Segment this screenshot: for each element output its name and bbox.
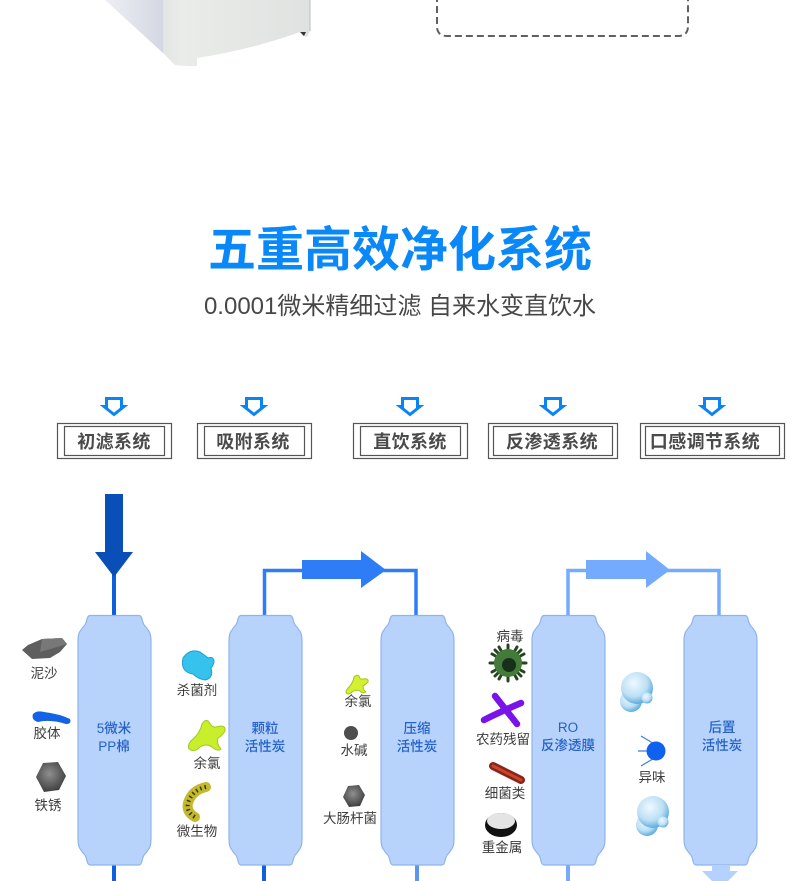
contaminant: 水碱 — [340, 726, 368, 758]
filter: 颗粒活性炭: 颗粒 — [252, 720, 278, 736]
water molecule upper — [620, 672, 653, 712]
contaminant: 余氯: 余氯 — [194, 755, 221, 771]
contaminant: 大肠杆菌 — [323, 785, 377, 826]
contaminant: 重金属 — [482, 813, 522, 855]
system: 反渗透系统 — [488, 398, 618, 458]
system labels row — [58, 398, 784, 458]
contaminant: 泥沙 — [22, 638, 67, 681]
system: 吸附系统: 吸附系统 — [216, 431, 290, 452]
contaminant: 胶体: 胶体 — [34, 725, 61, 741]
filter: RO反渗透膜 — [532, 616, 605, 865]
filter: 5微米 PP棉: 5微米 — [97, 721, 132, 736]
inlet arrow — [95, 494, 133, 616]
system: 口感调节系统: 口感调节系统 — [650, 431, 760, 452]
contaminant: 胶体 — [33, 711, 70, 741]
filter: 后置活性炭: 后置 — [708, 720, 736, 735]
contaminant: 细菌类: 细菌类 — [485, 786, 525, 801]
contaminant: 大肠杆菌: 大肠杆菌 — [323, 811, 377, 826]
filter: 压缩活性炭: 压缩 — [404, 721, 430, 736]
contaminant: 细菌类 — [485, 766, 525, 801]
contaminant: 铁锈 — [34, 762, 66, 813]
contaminant: 重金属: 重金属 — [482, 840, 522, 855]
outlet arrow — [702, 866, 738, 881]
filter: RO反渗透膜: RO — [558, 720, 578, 735]
contaminant: 农药残留 — [476, 696, 530, 747]
system: 初滤系统: 初滤系统 — [77, 431, 151, 452]
water molecule lower — [636, 796, 669, 836]
contaminant: 泥沙: 泥沙 — [30, 666, 58, 681]
product photo: purifier base — [105, 0, 310, 66]
filter: RO反渗透膜: 反渗透膜 — [541, 737, 595, 753]
title: 五重高效净化系统 — [208, 224, 592, 277]
contaminant: 水碱: 水碱 — [340, 743, 368, 758]
contaminant: 病毒: 病毒 — [496, 629, 524, 644]
contaminant: 铁锈: 铁锈 — [34, 798, 62, 813]
contaminant: 余氯 (small): 余氯 — [344, 693, 372, 709]
contaminant: 农药残留: 农药残留 — [476, 732, 530, 747]
filter: 后置活性炭: 活性炭 — [702, 738, 742, 753]
contaminant: 杀菌剂 — [177, 651, 217, 698]
system: 口感调节系统 — [640, 398, 784, 458]
filter: 压缩活性炭 — [381, 616, 454, 865]
system: 吸附系统 — [198, 398, 312, 458]
contaminant: 杀菌剂: 杀菌剂 — [177, 683, 217, 698]
outlet pipes — [112, 865, 570, 881]
contaminant: 异味 — [638, 736, 666, 785]
pipe and arrow: activated carbon stage — [264, 551, 416, 616]
filter: 5微米 PP棉: PP棉 — [98, 738, 130, 754]
filter: 后置活性炭 — [684, 616, 757, 865]
filter: 5微米 PP棉 — [78, 616, 151, 865]
pipe and arrow: RO stage — [568, 551, 719, 616]
contaminant: 微生物 — [177, 787, 217, 839]
contaminant: 病毒 — [490, 629, 526, 681]
contaminant: 余氯 (small) — [344, 675, 372, 709]
system: 直饮系统: 直饮系统 — [373, 431, 447, 452]
filter: 颗粒活性炭: 活性炭 — [245, 739, 285, 754]
contaminant: 异味: 异味 — [638, 770, 666, 785]
subtitle: 0.0001微米精细过滤 自来水变直饮水 — [204, 293, 596, 320]
filter: 颗粒活性炭 — [229, 616, 302, 865]
contaminant: 微生物: 微生物 — [177, 824, 217, 839]
system: 反渗透系统: 反渗透系统 — [506, 431, 598, 452]
contaminant: 余氯 — [188, 720, 225, 771]
filter: 压缩活性炭: 活性炭 — [397, 739, 437, 754]
system: 初滤系统 — [58, 398, 172, 458]
system: 直饮系统 — [354, 398, 468, 458]
dashed callout box — [437, 0, 688, 36]
